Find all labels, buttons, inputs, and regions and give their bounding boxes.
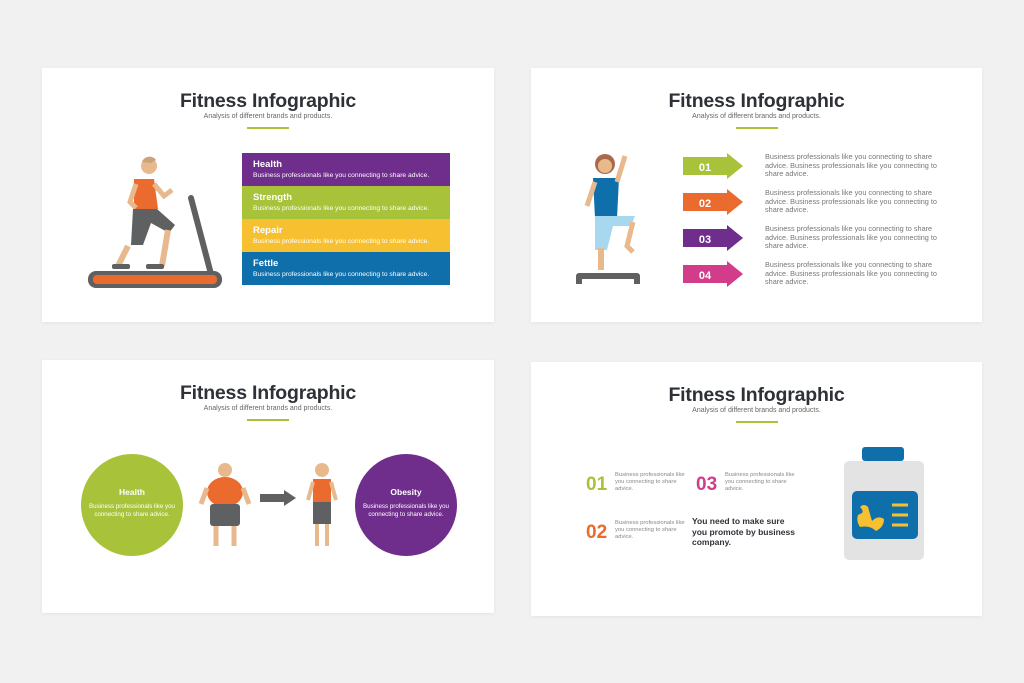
panel: step arrows: [531, 68, 982, 322]
arrow 02: 02: [699, 198, 711, 210]
text 03: Business professionals like you connecting to share advice. Business professionals like you connecting to share advice.: [765, 224, 937, 250]
bar: Fettle: Business professionals like you connecting to share advice.: [253, 271, 429, 278]
text 02: Business professionals like you connecting to share advice. Business professionals like you connecting to share advice.: [765, 188, 937, 214]
arrow 03: 03: [699, 234, 711, 246]
bar: Repair: Repair: [253, 225, 283, 236]
icon: supplement jar: [844, 447, 924, 560]
text 01: Business professionals like you connecting to share advice. Business professionals like you connecting to share advice.: [765, 152, 937, 178]
item 01: [586, 472, 685, 495]
item 03: [696, 472, 795, 495]
icon: step exerciser: [576, 154, 640, 284]
circle: Health: Business professionals like you connecting to share advice.: [89, 503, 175, 518]
item 01: 01: [586, 474, 607, 495]
arrow 01: 01: [699, 162, 711, 174]
bar: Repair: [242, 219, 450, 252]
item 02: 02: [586, 522, 607, 543]
arrow 01: [683, 153, 743, 179]
icon: heavy person: [198, 463, 252, 546]
title: Fitness Infographic: [180, 90, 356, 112]
icon: fit person: [306, 463, 338, 546]
callout text: You need to make sure you promote by business company.: [692, 516, 795, 547]
arrow 02: [683, 189, 743, 215]
bar: Health: [242, 153, 450, 186]
bar: Repair: Business professionals like you connecting to share advice.: [253, 238, 429, 245]
item 02: [586, 520, 685, 543]
subtitle: Analysis of different brands and products.: [692, 407, 821, 414]
item 02: Business professionals like you connecting to share advice.: [615, 520, 685, 540]
circle: Health: [81, 454, 183, 556]
text 04: Business professionals like you connecting to share advice. Business professionals like you connecting to share advice.: [765, 260, 937, 286]
subtitle: Analysis of different brands and products.: [204, 405, 332, 412]
bar: Fettle: [242, 252, 450, 285]
arrow 04: 04: [699, 270, 712, 282]
circle: Obesity: [355, 454, 457, 556]
bar: Health: Health: [253, 159, 282, 170]
circle: Obesity: Business professionals like you connecting to share advice.: [363, 503, 449, 518]
icon: treadmill runner: [88, 156, 222, 288]
title: Fitness Infographic: [180, 382, 356, 404]
bar: Strength: Strength: [253, 192, 292, 203]
item 03: 03: [696, 474, 717, 495]
subtitle: Analysis of different brands and products.: [692, 113, 821, 120]
bar: Health: Business professionals like you connecting to share advice.: [253, 172, 429, 179]
arrow: [260, 490, 296, 506]
arrow 04: [683, 261, 743, 287]
panel: supplement: [531, 362, 982, 616]
subtitle: Analysis of different brands and products.: [204, 113, 332, 120]
title: Fitness Infographic: [668, 90, 845, 112]
bar: Strength: Business professionals like you connecting to share advice.: [253, 205, 429, 212]
circle: Health: Health: [119, 487, 145, 497]
panel: health to obesity: [42, 360, 494, 613]
item 01: Business professionals like you connecting to share advice.: [615, 472, 685, 492]
item 03: Business professionals like you connecting to share advice.: [725, 472, 795, 492]
panel: treadmill: [42, 68, 494, 322]
bar: Fettle: Fettle: [253, 258, 278, 269]
title: Fitness Infographic: [668, 384, 845, 406]
arrow 03: [683, 225, 743, 251]
circle: Obesity: Obesity: [390, 487, 422, 497]
bar: Strength: [242, 186, 450, 219]
